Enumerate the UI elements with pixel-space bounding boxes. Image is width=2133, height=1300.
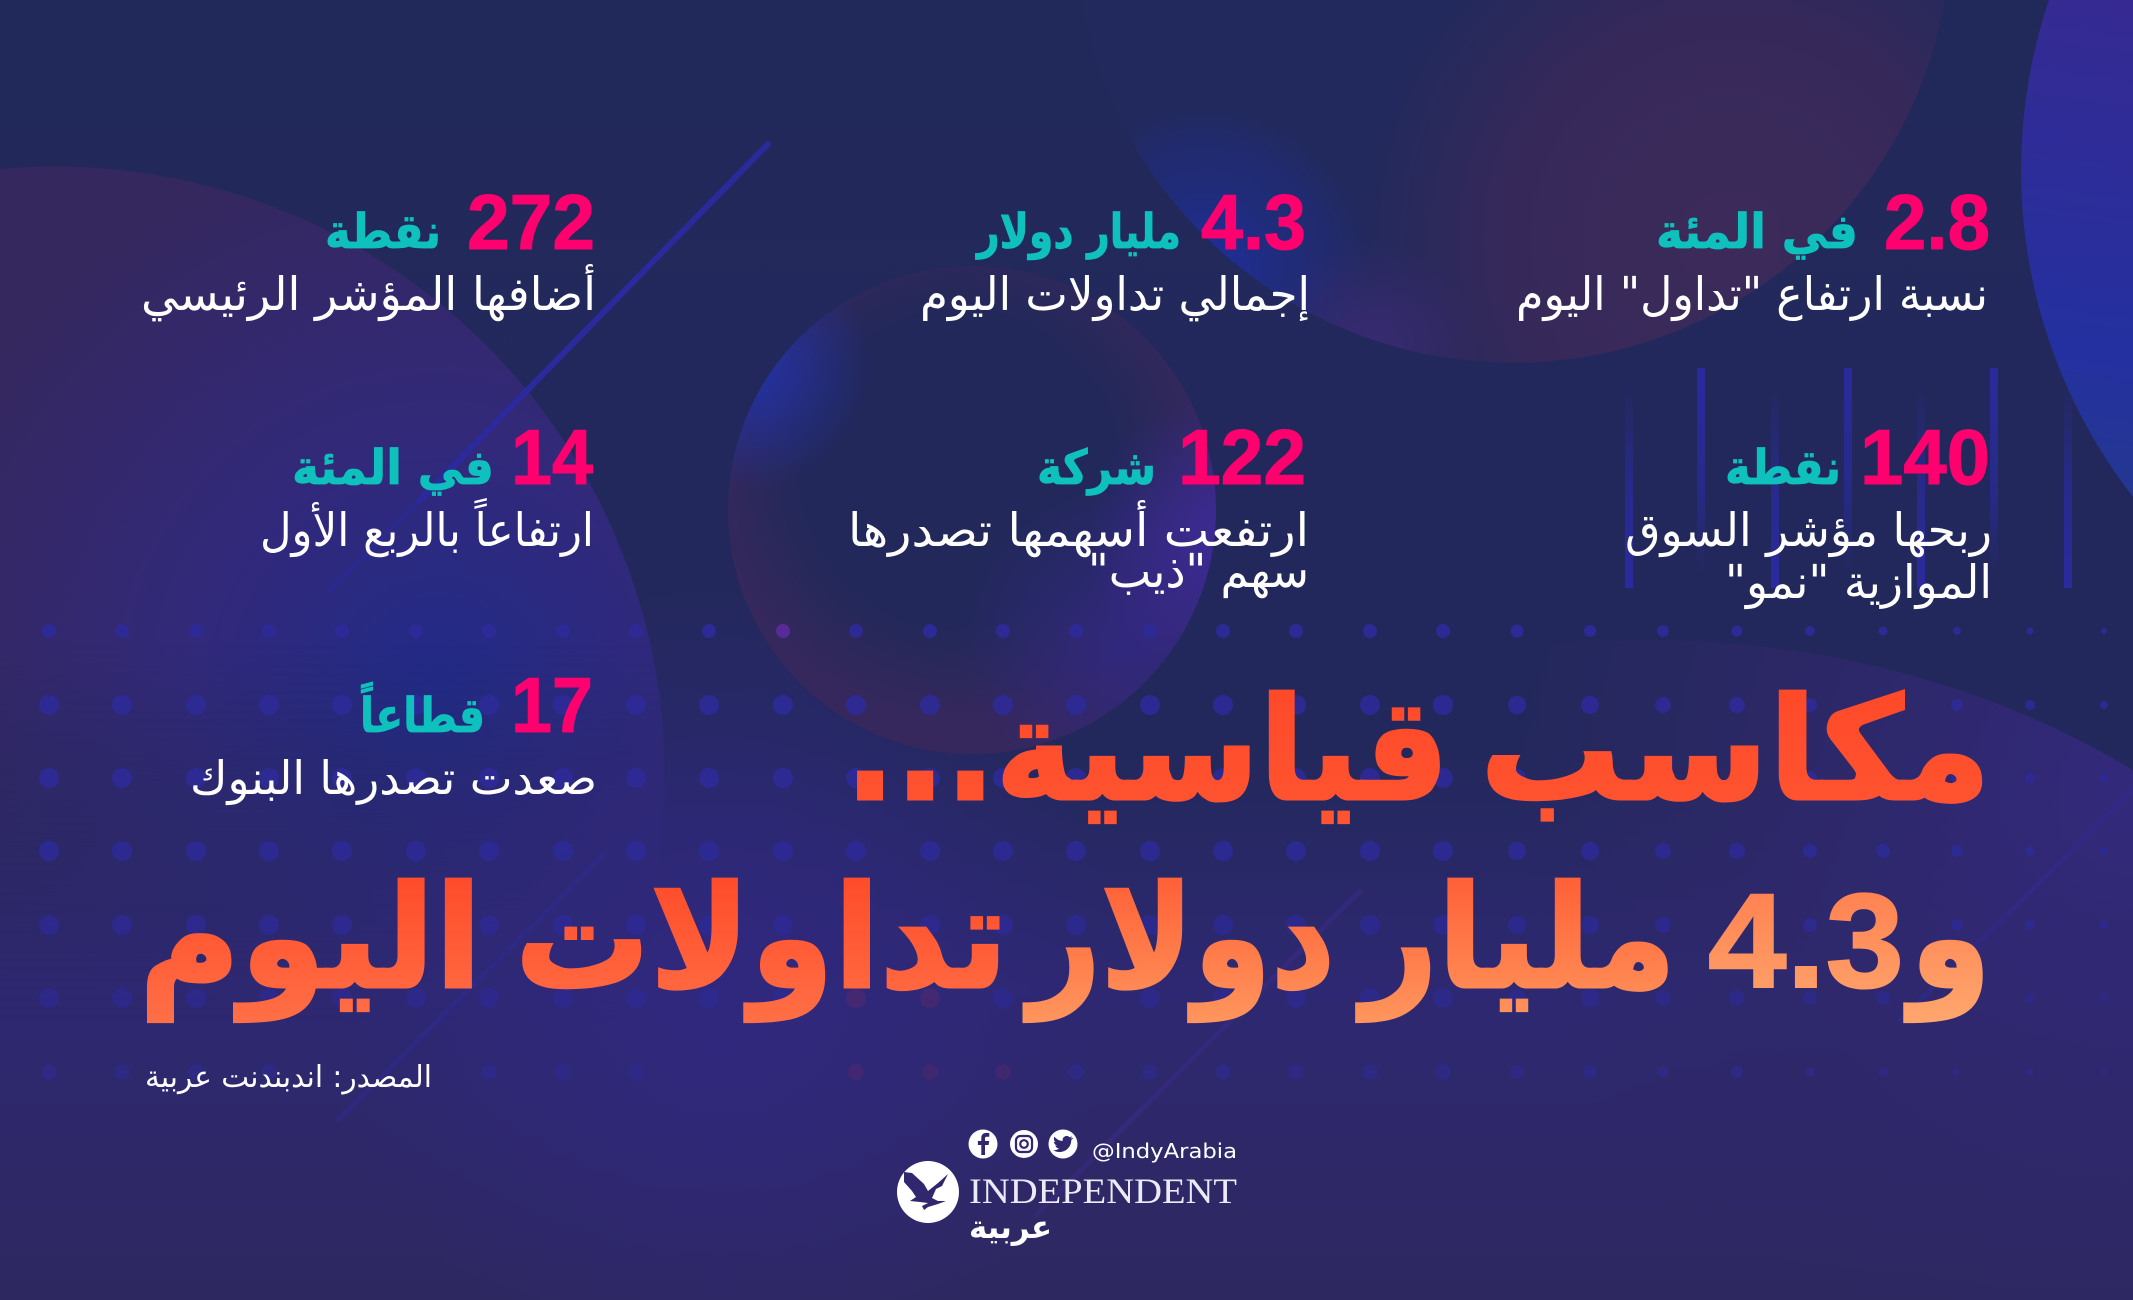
number: 14: [511, 413, 593, 501]
background shape: top circle: [1081, 0, 1945, 363]
number: 17: [511, 661, 593, 749]
stat: 4.3 billion: [920, 178, 1310, 322]
logo: arabic wordmark: عربية: [969, 1208, 1052, 1246]
unit: قطاعاً: [360, 681, 485, 744]
background shape: lower right blob: [850, 640, 2133, 1300]
stat: 140 points: [1625, 413, 1992, 610]
icon: instagram: [1010, 1130, 1038, 1158]
title line 2: دولار: [1024, 856, 1335, 1022]
title line 2: تداولات: [515, 856, 1008, 1022]
stat: 2.8 percent: [1516, 178, 1990, 322]
stat: 14 percent: [260, 413, 594, 558]
description: ارتفاعاً بالربع الأول: [260, 498, 594, 558]
number: 140: [1860, 413, 1990, 501]
unit: في المئة: [292, 440, 494, 496]
brand footer: [897, 1130, 1237, 1246]
icon: twitter: [1048, 1130, 1078, 1158]
decorative lines: [330, 144, 2133, 1215]
description: أضافها المؤشر الرئيسي: [141, 264, 596, 322]
icon: facebook: [968, 1130, 998, 1158]
dot grid: [39, 624, 2108, 1080]
number: 122: [1178, 413, 1306, 501]
background shape: lower glow: [320, 580, 1120, 1300]
title line 2: [139, 856, 1991, 1022]
title line 2: 4.3: [1708, 867, 1904, 1016]
description: إجمالي تداولات اليوم: [920, 267, 1310, 322]
description: صعدت تصدرها البنوك: [190, 751, 597, 806]
title line 1: [845, 668, 1991, 833]
background shape: middle circle: [728, 266, 1216, 754]
unit: نقطة: [325, 204, 441, 260]
unit: شركة: [1037, 440, 1156, 496]
description line 2: سهم "ذيب": [1088, 544, 1309, 598]
source note: المصدر: اندبندنت عربية: [145, 1060, 432, 1095]
title line 2: مليار: [1356, 856, 1676, 1022]
description line 1: ارتفعت أسهمها تصدرها: [848, 500, 1309, 557]
description line 2: الموازية "نمو": [1725, 555, 1992, 610]
unit: في المئة: [1656, 204, 1858, 260]
title line 1: مكاسب: [1480, 668, 1991, 833]
logo: wordmark: INDEPENDENT: [969, 1171, 1237, 1211]
unit: مليار دولار: [975, 204, 1181, 260]
title line 2: و: [1904, 856, 1991, 1022]
logo: eagle roundel: [897, 1161, 959, 1223]
decorative vertical bars: [1625, 368, 2072, 588]
background shape: right circle: [2021, 0, 2133, 497]
description: نسبة ارتفاع "تداول" اليوم: [1516, 267, 1988, 322]
title: [139, 668, 1991, 1022]
description line 1: ربحها مؤشر السوق: [1625, 503, 1992, 558]
number: 272: [467, 178, 595, 266]
title line 2: اليوم: [139, 856, 482, 1022]
title line 1: قياسية...: [845, 668, 1449, 833]
stat: 17 sectors: [190, 661, 597, 806]
unit: نقطة: [1725, 440, 1841, 496]
stat: 272 points: [141, 178, 596, 322]
stat: 122 companies: [848, 413, 1309, 598]
social handle: @IndyArabia: [1092, 1139, 1237, 1163]
background shape: left blob: [0, 166, 664, 873]
number: 4.3: [1201, 178, 1306, 266]
number: 2.8: [1884, 178, 1990, 266]
